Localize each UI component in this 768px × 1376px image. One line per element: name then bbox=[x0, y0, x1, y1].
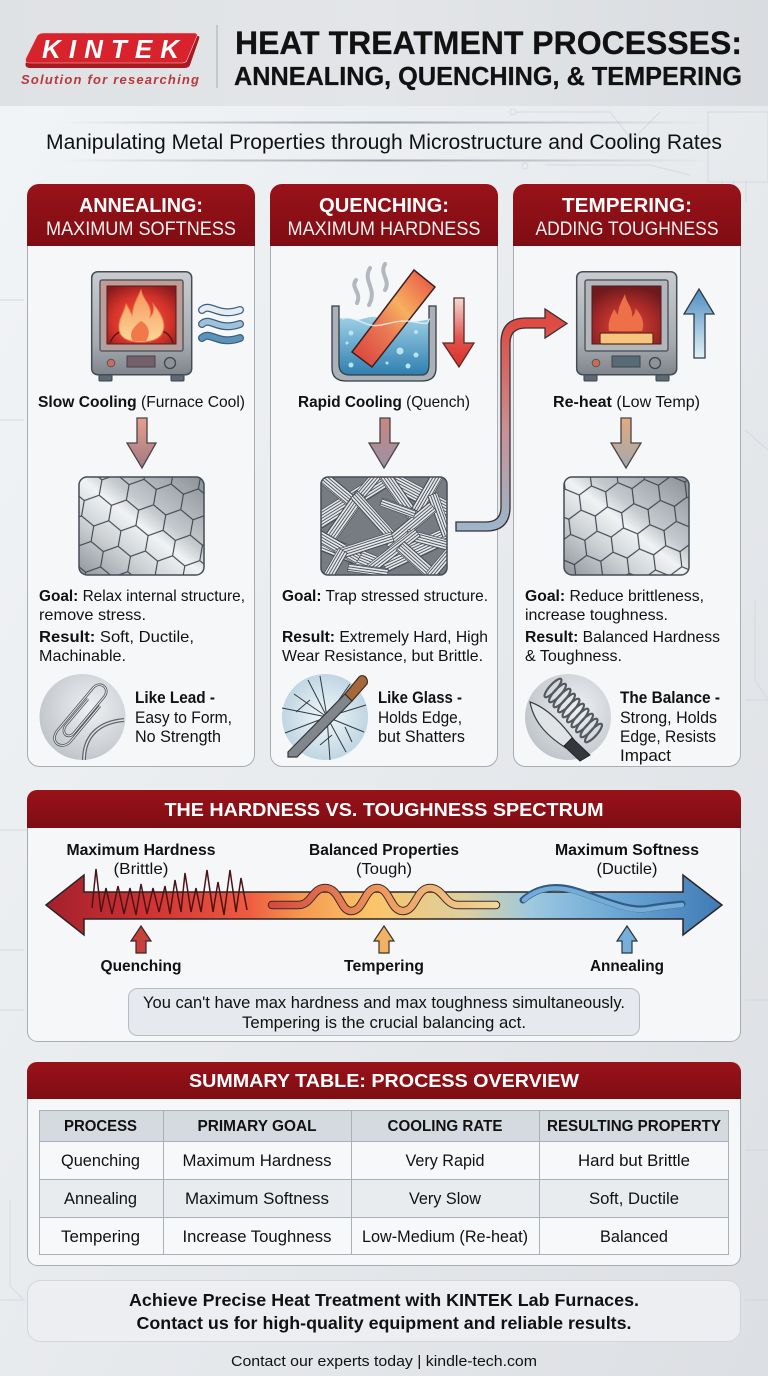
text: goal and result: Result: Soft, Ductile, bbox=[39, 629, 194, 646]
callout bbox=[128, 988, 640, 1036]
arrow: down bbox=[611, 418, 641, 468]
panel: quenching bbox=[270, 184, 498, 766]
panel: annealing bbox=[27, 184, 255, 766]
text: goal and result: & Toughness. bbox=[525, 648, 622, 665]
table header row: COOLING RATE bbox=[388, 1118, 503, 1135]
arrow: quenching marker bbox=[131, 926, 151, 953]
caption: like lead bbox=[135, 689, 232, 746]
title bbox=[234, 25, 742, 91]
arrow: down bbox=[369, 418, 399, 468]
row: quenching: Quenching bbox=[61, 1152, 140, 1170]
table header row: PRIMARY GOAL bbox=[198, 1118, 317, 1135]
caption: the balance: Strong, Holds bbox=[620, 709, 717, 727]
caption: like glass: but Shatters bbox=[378, 728, 465, 746]
arrow: quenching to tempering connector bbox=[456, 309, 567, 531]
title: ANNEALING, QUENCHING, & TEMPERING bbox=[234, 61, 742, 91]
row: annealing: Very Slow bbox=[409, 1190, 481, 1208]
row: tempering: Tempering bbox=[61, 1228, 140, 1246]
panel: tempering bbox=[513, 184, 741, 766]
label: maximum softness bbox=[555, 842, 699, 878]
table bbox=[39, 1110, 729, 1254]
arrow: down red bbox=[443, 298, 474, 367]
panel: summary table bbox=[27, 1062, 741, 1266]
table header row bbox=[64, 1118, 721, 1135]
callout: Tempering is the crucial balancing act. bbox=[242, 1014, 526, 1032]
callout: You can't have max hardness and max toughness simultaneously. bbox=[143, 994, 625, 1012]
caption: the balance: Edge, Resists bbox=[620, 728, 716, 746]
icon: quench bath with hot bar bbox=[332, 264, 436, 381]
row: annealing: Soft, Ductile bbox=[589, 1190, 679, 1208]
footer: Contact our experts today | kindle-tech.com bbox=[231, 1353, 537, 1370]
caption: like glass: Like Glass - bbox=[378, 689, 462, 707]
label: balanced properties: (Tough) bbox=[356, 861, 412, 878]
icon: furnace with flame bbox=[92, 272, 192, 381]
arrow: up blue bbox=[684, 289, 714, 358]
text: goal and result: Wear Resistance, but Brittle. bbox=[282, 648, 483, 665]
row: annealing: Annealing bbox=[64, 1190, 137, 1208]
label: quenching: Quenching bbox=[100, 958, 182, 975]
microstructure: tempered grains bbox=[564, 477, 689, 575]
logo: KINTEK: KINTEK bbox=[42, 34, 181, 64]
arrow: down bbox=[127, 418, 156, 468]
row: quenching: Very Rapid bbox=[406, 1152, 484, 1170]
text: goal and result: Goal: Trap stressed structure. bbox=[282, 588, 488, 605]
text: goal and result: increase toughness. bbox=[525, 607, 668, 624]
label: maximum hardness: Maximum Hardness bbox=[66, 842, 216, 859]
heading: MAXIMUM SOFTNESS bbox=[46, 218, 236, 240]
call to action: Contact us for high-quality equipment and reliable results. bbox=[136, 1313, 632, 1333]
label: annealing: Annealing bbox=[590, 958, 664, 975]
caption: like glass: Holds Edge, bbox=[378, 709, 462, 727]
heading: THE HARDNESS VS. TOUGHNESS SPECTRUM bbox=[164, 799, 604, 820]
heading bbox=[536, 195, 718, 240]
label: balanced properties: Balanced Properties bbox=[309, 842, 459, 859]
label: maximum hardness: (Brittle) bbox=[114, 861, 168, 878]
logo: KINTEK: Solution for researching bbox=[21, 72, 199, 87]
text: goal and result: remove stress. bbox=[39, 607, 146, 624]
text: goal and result bbox=[525, 588, 720, 665]
wave: tough bbox=[272, 888, 496, 911]
row: quenching bbox=[61, 1152, 690, 1170]
header band bbox=[0, 0, 768, 106]
label: rapid cooling: Rapid Cooling (Quench) bbox=[298, 394, 470, 411]
heading bbox=[288, 195, 480, 240]
caption: like glass bbox=[378, 689, 465, 746]
text: goal and result: Result: Extremely Hard, High bbox=[282, 629, 488, 646]
icon: cooling waves bbox=[202, 308, 240, 340]
row: tempering: Increase Toughness bbox=[182, 1228, 332, 1246]
row: annealing bbox=[64, 1190, 679, 1208]
row: tempering: Balanced bbox=[600, 1228, 668, 1246]
wave: ductile bbox=[523, 887, 682, 910]
caption: like lead: No Strength bbox=[135, 728, 221, 746]
zigzag: brittle bbox=[92, 869, 247, 915]
text: goal and result bbox=[39, 588, 245, 665]
label: maximum hardness bbox=[66, 842, 216, 878]
caption: the balance: Impact bbox=[620, 747, 671, 765]
row: tempering: Low-Medium (Re-heat) bbox=[362, 1228, 528, 1246]
heading: ANNEALING: bbox=[79, 195, 203, 217]
row: quenching: Hard but Brittle bbox=[578, 1152, 690, 1170]
icon: furnace with bar bbox=[577, 272, 677, 381]
icon: spring and knife bbox=[525, 674, 611, 761]
logo: KINTEK bbox=[21, 33, 199, 87]
arrow: tempering marker bbox=[374, 926, 394, 953]
row: annealing: Maximum Softness bbox=[185, 1190, 329, 1208]
table header row: RESULTING PROPERTY bbox=[547, 1118, 721, 1135]
arrow: annealing marker bbox=[617, 926, 637, 953]
chart: spectrum arrow bbox=[46, 869, 722, 935]
microstructure: equiaxed grains bbox=[79, 477, 204, 575]
caption: like lead: Like Lead - bbox=[135, 689, 215, 707]
label: maximum softness: Maximum Softness bbox=[555, 842, 699, 859]
heading: QUENCHING: bbox=[319, 195, 449, 217]
text: goal and result: Goal: Relax internal structure, bbox=[39, 588, 245, 605]
heading: TEMPERING: bbox=[562, 195, 692, 217]
label: slow cooling: Slow Cooling (Furnace Cool) bbox=[38, 394, 245, 411]
heading: ADDING TOUGHNESS bbox=[536, 218, 718, 240]
call to action: Achieve Precise Heat Treatment with KINTEK Lab Furnaces. bbox=[129, 1290, 639, 1310]
icon: file on shattered glass bbox=[282, 674, 368, 760]
title: HEAT TREATMENT PROCESSES: bbox=[235, 25, 742, 61]
panel: spectrum bbox=[27, 790, 741, 1042]
label: maximum softness: (Ductile) bbox=[596, 861, 658, 878]
icon: paperclip bbox=[40, 674, 126, 760]
text: goal and result: Goal: Reduce brittleness, bbox=[525, 588, 704, 605]
table header row: PROCESS bbox=[64, 1118, 137, 1135]
label: balanced properties bbox=[309, 842, 459, 878]
label: tempering: Tempering bbox=[344, 958, 424, 975]
caption: the balance bbox=[620, 689, 720, 765]
text: goal and result: Machinable. bbox=[39, 648, 126, 665]
heading: MAXIMUM HARDNESS bbox=[288, 218, 480, 240]
row: quenching: Maximum Hardness bbox=[182, 1152, 332, 1170]
row: tempering bbox=[61, 1228, 668, 1246]
caption: like lead: Easy to Form, bbox=[135, 709, 232, 727]
text: goal and result bbox=[282, 588, 488, 665]
microstructure: martensite needles bbox=[320, 476, 448, 576]
heading: SUMMARY TABLE: PROCESS OVERVIEW bbox=[189, 1070, 580, 1091]
call to action bbox=[28, 1280, 740, 1342]
heading bbox=[46, 195, 236, 240]
text: goal and result: Result: Balanced Hardness bbox=[525, 629, 720, 646]
caption: the balance: The Balance - bbox=[620, 689, 720, 707]
label: re-heat: Re-heat (Low Temp) bbox=[553, 394, 700, 411]
subtitle: Manipulating Metal Properties through Microstructure and Cooling Rates bbox=[46, 130, 722, 154]
